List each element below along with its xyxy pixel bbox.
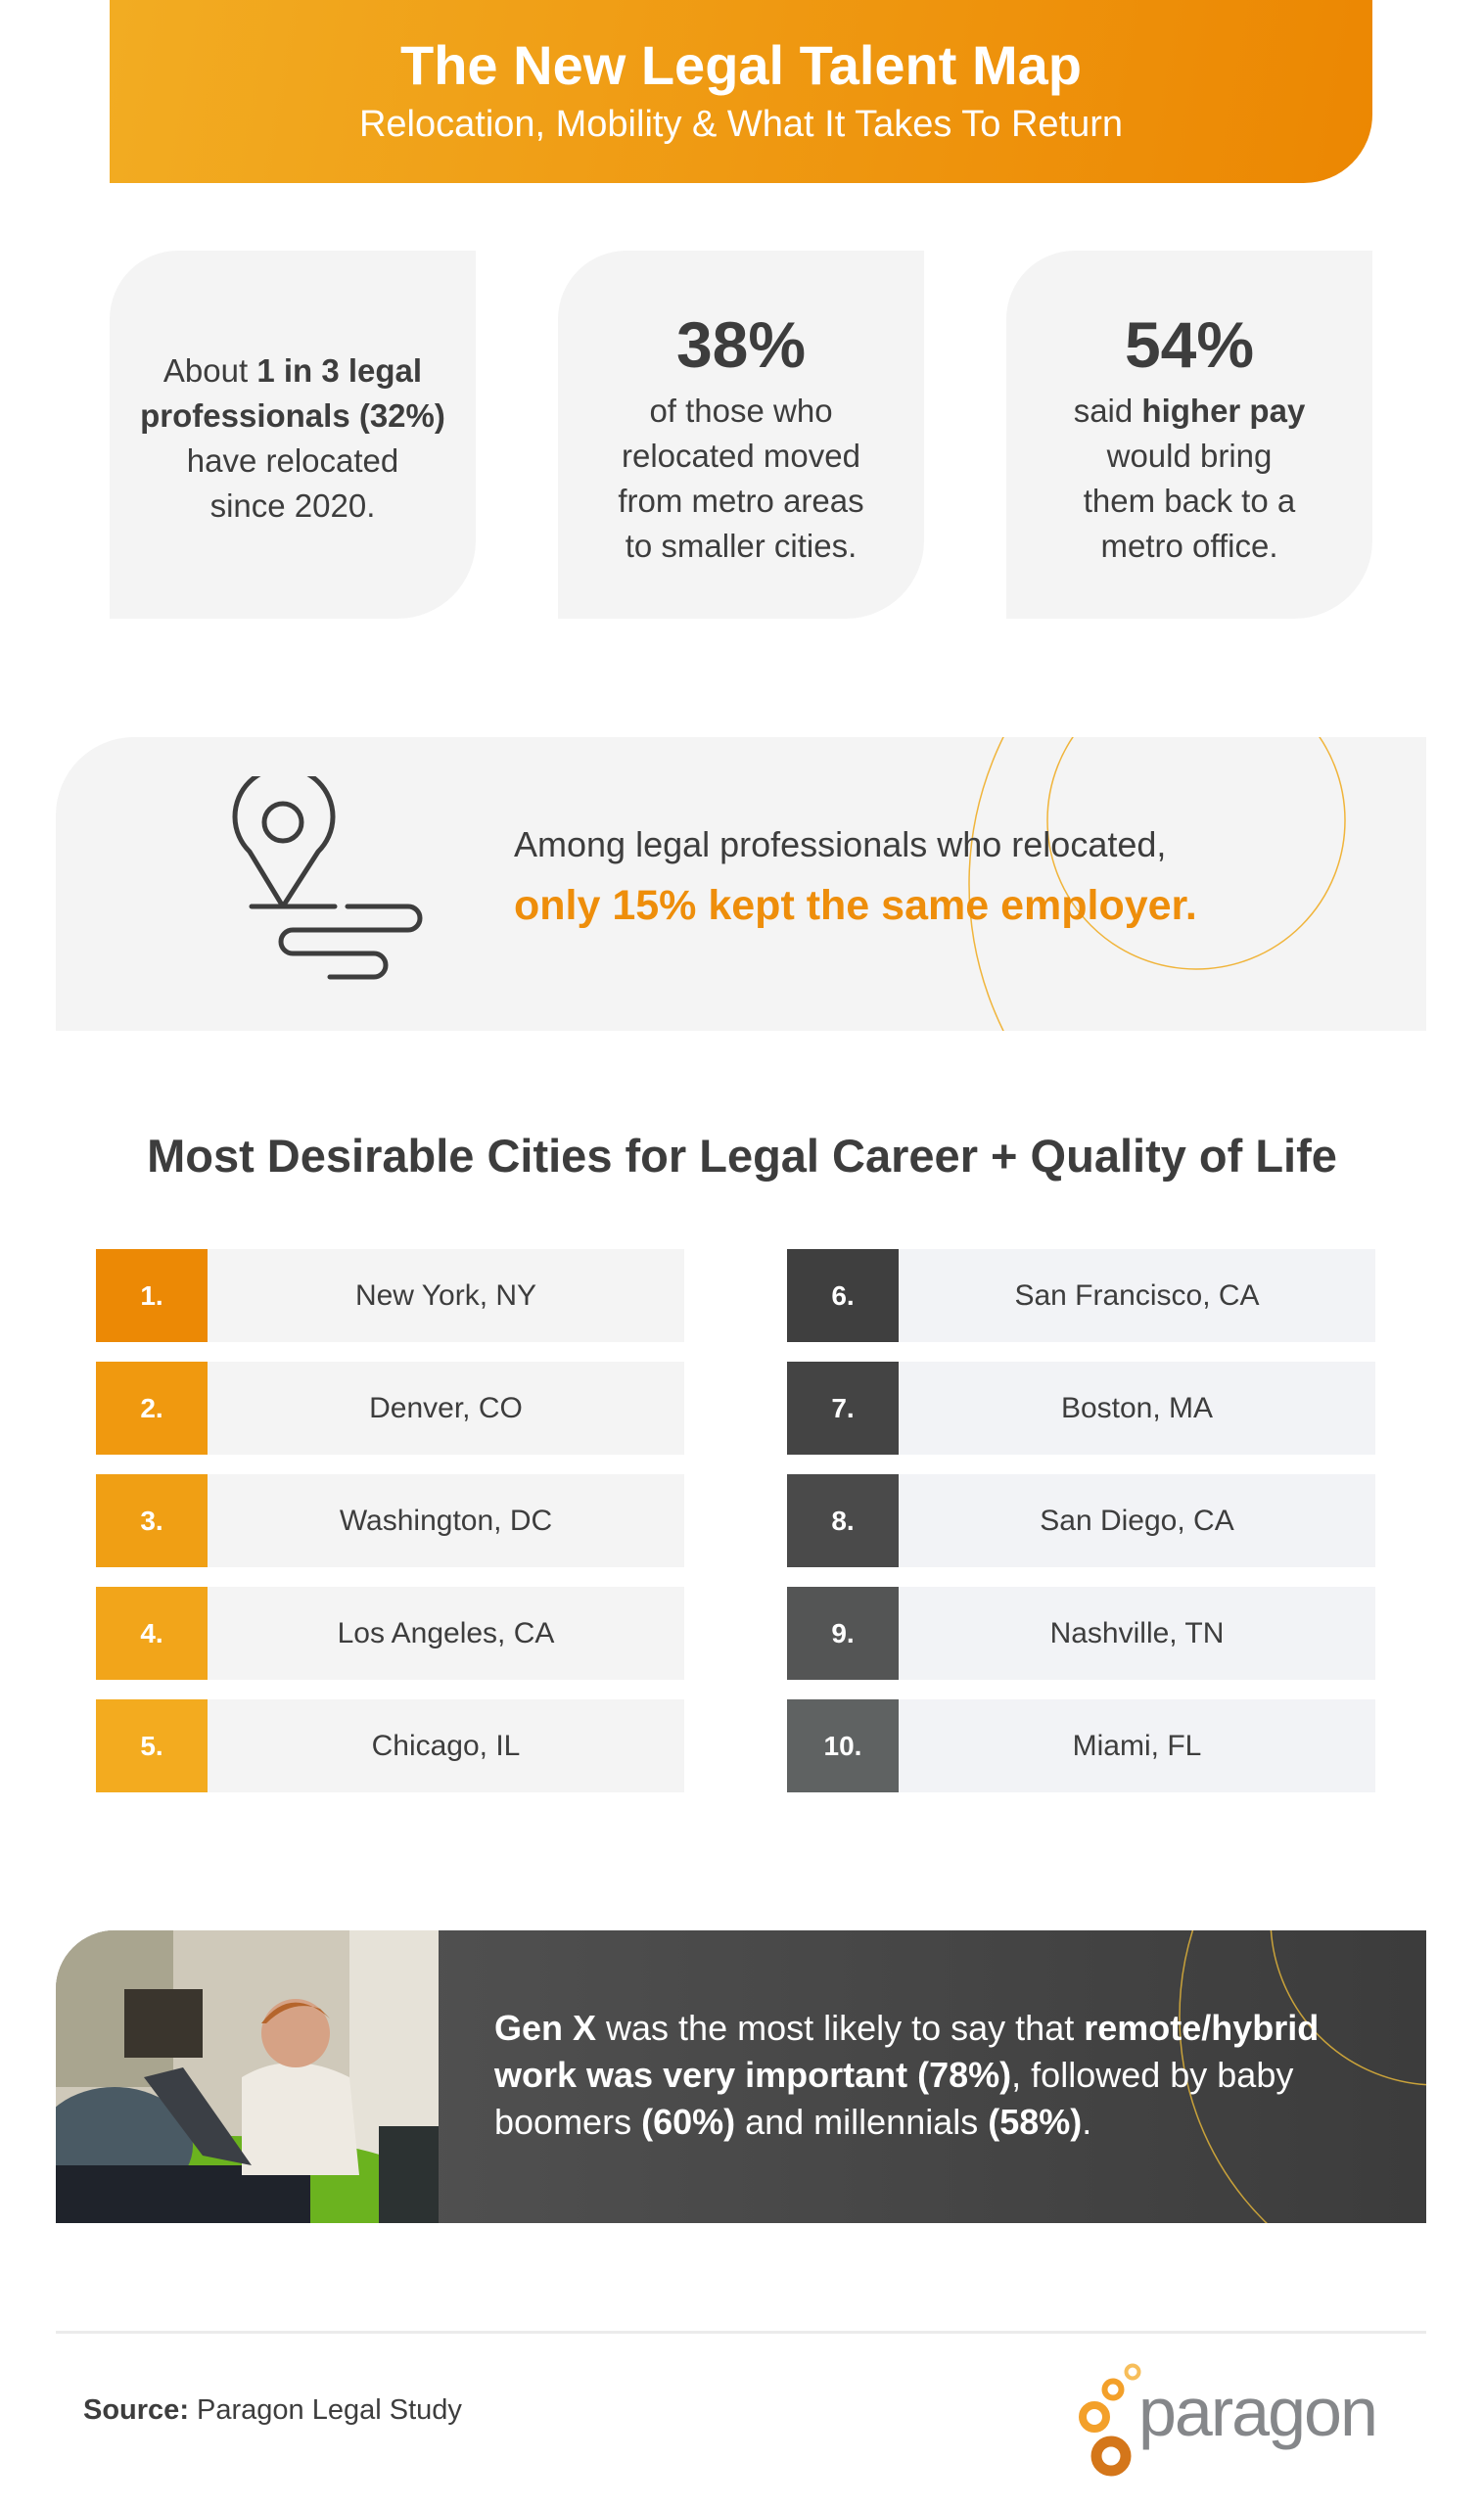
ranking list: cities 1-5: 4. <box>140 1617 163 1648</box>
ranking list: cities 6-10: San Diego, CA <box>1040 1504 1234 1537</box>
stat 38% number: 38% <box>676 308 806 381</box>
ranking list: cities 6-10: 6. <box>831 1280 855 1310</box>
stat card: 54% <box>1006 251 1372 619</box>
ranking list: cities 1-5: 5. <box>140 1731 163 1760</box>
text: said higher pay <box>1074 393 1305 429</box>
callout text <box>514 824 1197 929</box>
ranking list: cities 1-5: Denver, CO <box>369 1392 523 1423</box>
callout text: only 15% kept the same employer. <box>514 882 1197 929</box>
decorative circles <box>1179 1930 1426 2223</box>
ranking list: cities 6-10: 7. <box>831 1392 855 1423</box>
text: to smaller cities. <box>626 528 857 564</box>
section heading: cities: Most Desirable Cities for Legal Career + Quality of Life <box>147 1130 1337 1182</box>
text: would bring <box>1107 438 1272 474</box>
logo: paragon <box>1079 2363 1376 2477</box>
ranking list: cities 1-5: New York, NY <box>355 1278 536 1312</box>
text: from metro areas <box>618 483 864 519</box>
ranking list: cities 6-10 <box>787 1249 1375 1792</box>
ranking list: cities 1-5: 2. <box>140 1392 163 1423</box>
title: The New Legal Talent Map <box>400 34 1082 96</box>
ranking list: cities 1-5: Los Angeles, CA <box>338 1617 554 1648</box>
ranking list: cities 1-5: 3. <box>140 1506 163 1535</box>
decorative circles <box>968 737 1346 1031</box>
panel: employer callout <box>56 737 1426 1031</box>
ranking list: cities 1-5: Chicago, IL <box>372 1729 520 1762</box>
ranking list: cities 6-10: 9. <box>831 1617 855 1648</box>
text: of those who <box>649 393 833 429</box>
text: metro office. <box>1101 528 1277 564</box>
stat 54% number: 54% <box>1125 308 1254 381</box>
subtitle: Relocation, Mobility & What It Takes To Return <box>359 104 1123 145</box>
text: relocated moved <box>622 438 860 474</box>
text: them back to a <box>1084 483 1295 519</box>
stat card: 1 in 3: have relocated <box>187 442 398 479</box>
ranking list: cities 6-10: 10. <box>824 1731 861 1760</box>
photo: person with laptop <box>56 1930 439 2223</box>
logo circles <box>1079 2363 1141 2477</box>
ranking list: cities 6-10: 8. <box>831 1506 855 1535</box>
stat card: 1 in 3: About 1 in 3 legal professionals (32%) <box>140 352 445 434</box>
header banner <box>110 0 1372 183</box>
stat card: 1 in 3: since 2020. <box>210 487 375 524</box>
ranking list: cities 6-10: Miami, FL <box>1073 1729 1201 1762</box>
source note: Source: Paragon Legal Study <box>83 2394 462 2426</box>
ranking list: cities 6-10: Nashville, TN <box>1050 1617 1224 1648</box>
ranking list: cities 1-5: 1. <box>140 1280 163 1310</box>
callout text: Gen X was the most likely to say that remote/hybrid work was very important (78%), followed by baby boomers (60%) and millennials (58%). <box>494 2008 1319 2142</box>
ranking list: cities 6-10: Boston, MA <box>1061 1392 1213 1423</box>
stat card: 1 in 3 <box>110 251 476 619</box>
ranking list: cities 1-5: Washington, DC <box>340 1504 552 1537</box>
panel: generations remote work <box>56 1930 1426 2223</box>
stat card: 38% <box>558 251 924 619</box>
ranking list: cities 1-5 <box>96 1249 684 1792</box>
ranking list: cities 6-10: San Francisco, CA <box>1014 1278 1260 1312</box>
callout text: Among legal professionals who relocated, <box>514 824 1166 864</box>
logo wordmark: paragon <box>1138 2374 1376 2450</box>
icon: location pin with path <box>233 776 423 979</box>
